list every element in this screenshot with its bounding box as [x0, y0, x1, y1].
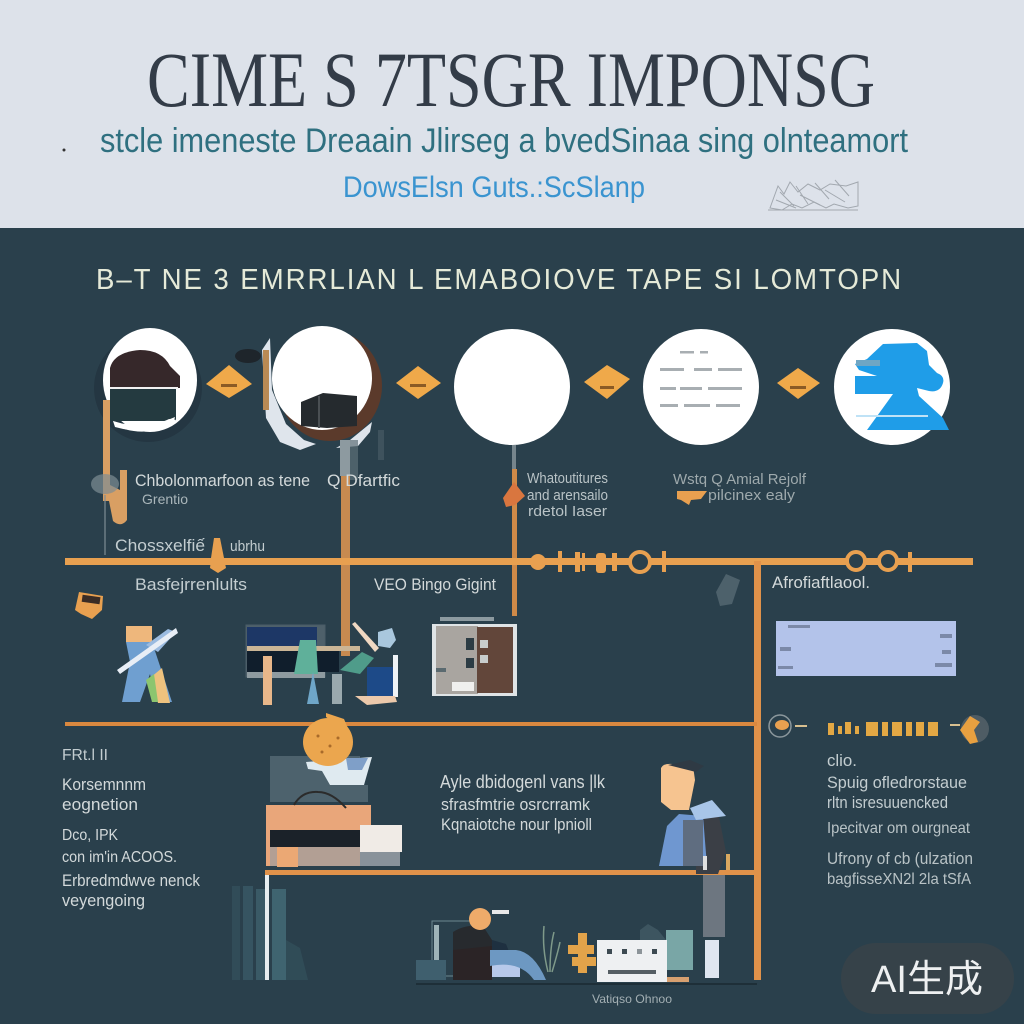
icon: circle five: [834, 329, 950, 445]
text: right column: clio.: [827, 751, 857, 770]
illustration: floor line: [416, 983, 757, 985]
text: left column: Dco, IPK: [62, 827, 118, 844]
text: lower label right: Afrofiaftlaool.: [772, 573, 870, 592]
icon: circle four: [643, 329, 759, 445]
illustration: right standing person: [659, 760, 730, 978]
text: center block: Kqnaiotche nour lpnioll: [441, 815, 592, 834]
text: right column: bagfisseXN2l 2la tSfA: [827, 871, 971, 888]
arrow: diamond four: [777, 368, 820, 399]
text: left column: con im'in ACOOS.: [62, 849, 177, 866]
text: step three label: rdetol Iaser: [528, 503, 607, 520]
section heading: B–T NE 3 EMRRLIAN L EMABOIOVE TAPE SI LOMTOPN: [96, 264, 903, 296]
text: step three label: Whatoutitures: [527, 470, 608, 487]
text: timeline label short: ubrhu: [230, 538, 265, 555]
text: left column: veyengoing: [62, 891, 145, 910]
icon: small shield: [75, 592, 103, 619]
panel: blue chart box: [776, 621, 956, 676]
text: right column: rltn isresuuencked: [827, 793, 948, 812]
text: step three label: [527, 470, 608, 520]
title: CIME S 7TSGR IMPONSG: [147, 36, 875, 123]
icon: circle one: [94, 328, 202, 442]
icon: building C: [432, 617, 517, 696]
arrow: diamond three: [584, 365, 630, 399]
text: lower label left: Basfejrrenlults: [135, 575, 247, 594]
text: left column: FRt.l II: [62, 747, 108, 764]
smudge near right line: [716, 574, 740, 606]
icon: figure B desk: [246, 622, 398, 705]
text: left column: Korsemnnm: [62, 775, 146, 794]
icon: circle three: [454, 329, 570, 445]
divider: second line: [65, 722, 757, 726]
text: center block: [440, 772, 606, 834]
text: footnote: Vatiqso Ohnoo: [592, 992, 672, 1006]
tagline: DowsElsn Guts.:ScSlanp: [343, 171, 645, 204]
text: left column: eognetion: [62, 795, 138, 814]
connector: vertical two: [340, 430, 384, 656]
illustration: shelf line: [265, 870, 757, 875]
timeline: main orange line with nodes: [65, 538, 973, 573]
dot mark: [62, 148, 66, 152]
text: right column: [827, 751, 973, 888]
text: left column: [62, 747, 200, 910]
text: step one label: Chbolonmarfoon as tene: [135, 471, 310, 490]
icon: figure A: [117, 626, 178, 703]
panel: dark body: [0, 228, 1024, 1024]
text: right column: Spuig ofledrorstaue: [827, 773, 967, 792]
text: step two label: Q Dfartfic: [327, 471, 400, 490]
text: right column: Ufrony of cb (ulzation: [827, 849, 973, 868]
text: step one note: Grentio: [142, 491, 188, 507]
text: step three label: and arensailo: [527, 487, 608, 504]
text: step four label: Wstq Q Amial Rejolf: [673, 471, 807, 488]
connector: vertical left: [91, 400, 127, 555]
text: left column: Erbredmdwve nenck: [62, 871, 200, 890]
text: center block: Ayle dbidogenl vans |lk: [440, 772, 606, 792]
text: lower label middle: VEO Bingo Gigint: [374, 575, 496, 594]
illustration: left bars: [232, 886, 308, 980]
illustration: left person at desk: [266, 713, 402, 867]
badge: AI label: [841, 943, 1014, 1014]
badge: AI label: AI生成: [871, 959, 983, 1001]
connector: vertical three: [503, 445, 525, 616]
text: center block: sfrasfmtrie osrcrramk: [441, 795, 590, 814]
text: step four label: [673, 471, 807, 505]
icon: sketch mark: [768, 180, 858, 210]
timeline: right ornamental chain: [769, 715, 989, 744]
illustration: seated person scene: [416, 908, 693, 982]
subtitle: stcle imeneste Dreaain Jlirseg a bvedSinaa sing olnteamort: [100, 122, 908, 160]
panel: header: [0, 0, 1024, 228]
icon: circle two: [235, 326, 382, 450]
illustration: left light post: [265, 875, 269, 980]
arrow: diamond one: [206, 365, 252, 398]
text: timeline label left: Chossxelfiế: [115, 536, 206, 555]
connector: right vertical: [754, 561, 761, 980]
arrow: diamond two: [396, 366, 441, 399]
text: right column: Ipecitvar om ourgneat: [827, 820, 971, 837]
text: step four label: pilcinex ealy: [708, 487, 796, 504]
